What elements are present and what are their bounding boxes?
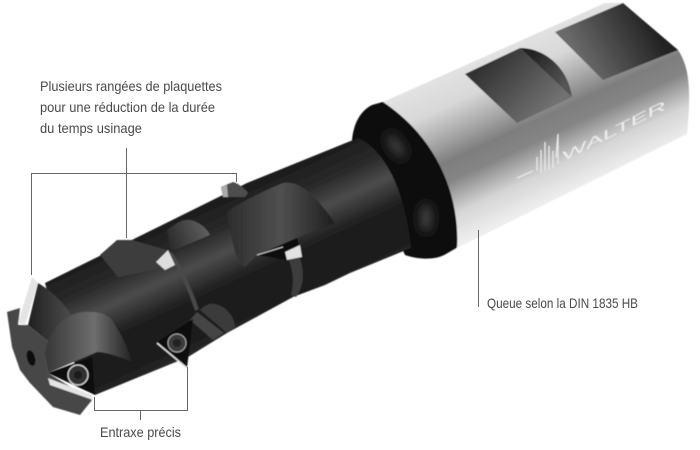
callout lines: centre distance	[94, 367, 188, 420]
rear tip silver	[221, 185, 228, 197]
middle band	[170, 253, 197, 310]
rear tip	[221, 182, 248, 197]
upper bonnet	[100, 240, 167, 277]
third band	[289, 258, 303, 297]
third insert	[257, 238, 302, 260]
third insert silver	[285, 245, 302, 260]
label: shank standard: Queue selon la DIN 1835 HB	[487, 295, 638, 311]
front face	[7, 308, 92, 415]
label: multiple rows of inserts: Plusieurs rangées de plaquettes	[40, 78, 222, 94]
lower gullet	[200, 304, 235, 333]
Walter logo	[517, 98, 669, 178]
upper bump	[167, 220, 210, 252]
shank flat right	[555, 3, 678, 80]
label: multiple rows of inserts: pour une réduction de la durée	[40, 99, 215, 115]
third insert edge	[257, 247, 283, 255]
Walter logo: WALTER	[559, 98, 669, 164]
front silver insert	[18, 277, 38, 325]
collar	[352, 100, 470, 259]
centre hole	[25, 349, 37, 367]
label: multiple rows of inserts: du temps usinage	[40, 120, 142, 136]
middle silver insert	[156, 250, 175, 270]
main cutter body	[45, 138, 411, 395]
shank flat left	[465, 48, 572, 123]
gullet stripe	[190, 312, 224, 340]
callout lines: multiple rows	[32, 148, 236, 275]
label: centre distance: Entraxe précis	[100, 424, 181, 440]
second insert	[157, 319, 193, 368]
rear pocket	[28, 283, 72, 343]
front bonnet	[45, 312, 132, 373]
third bonnet	[227, 183, 335, 267]
shank	[383, 3, 689, 248]
callout line: shank	[478, 230, 480, 307]
flat crescent	[520, 48, 572, 97]
label: multiple rows of inserts	[40, 78, 222, 136]
front insert	[48, 357, 95, 400]
